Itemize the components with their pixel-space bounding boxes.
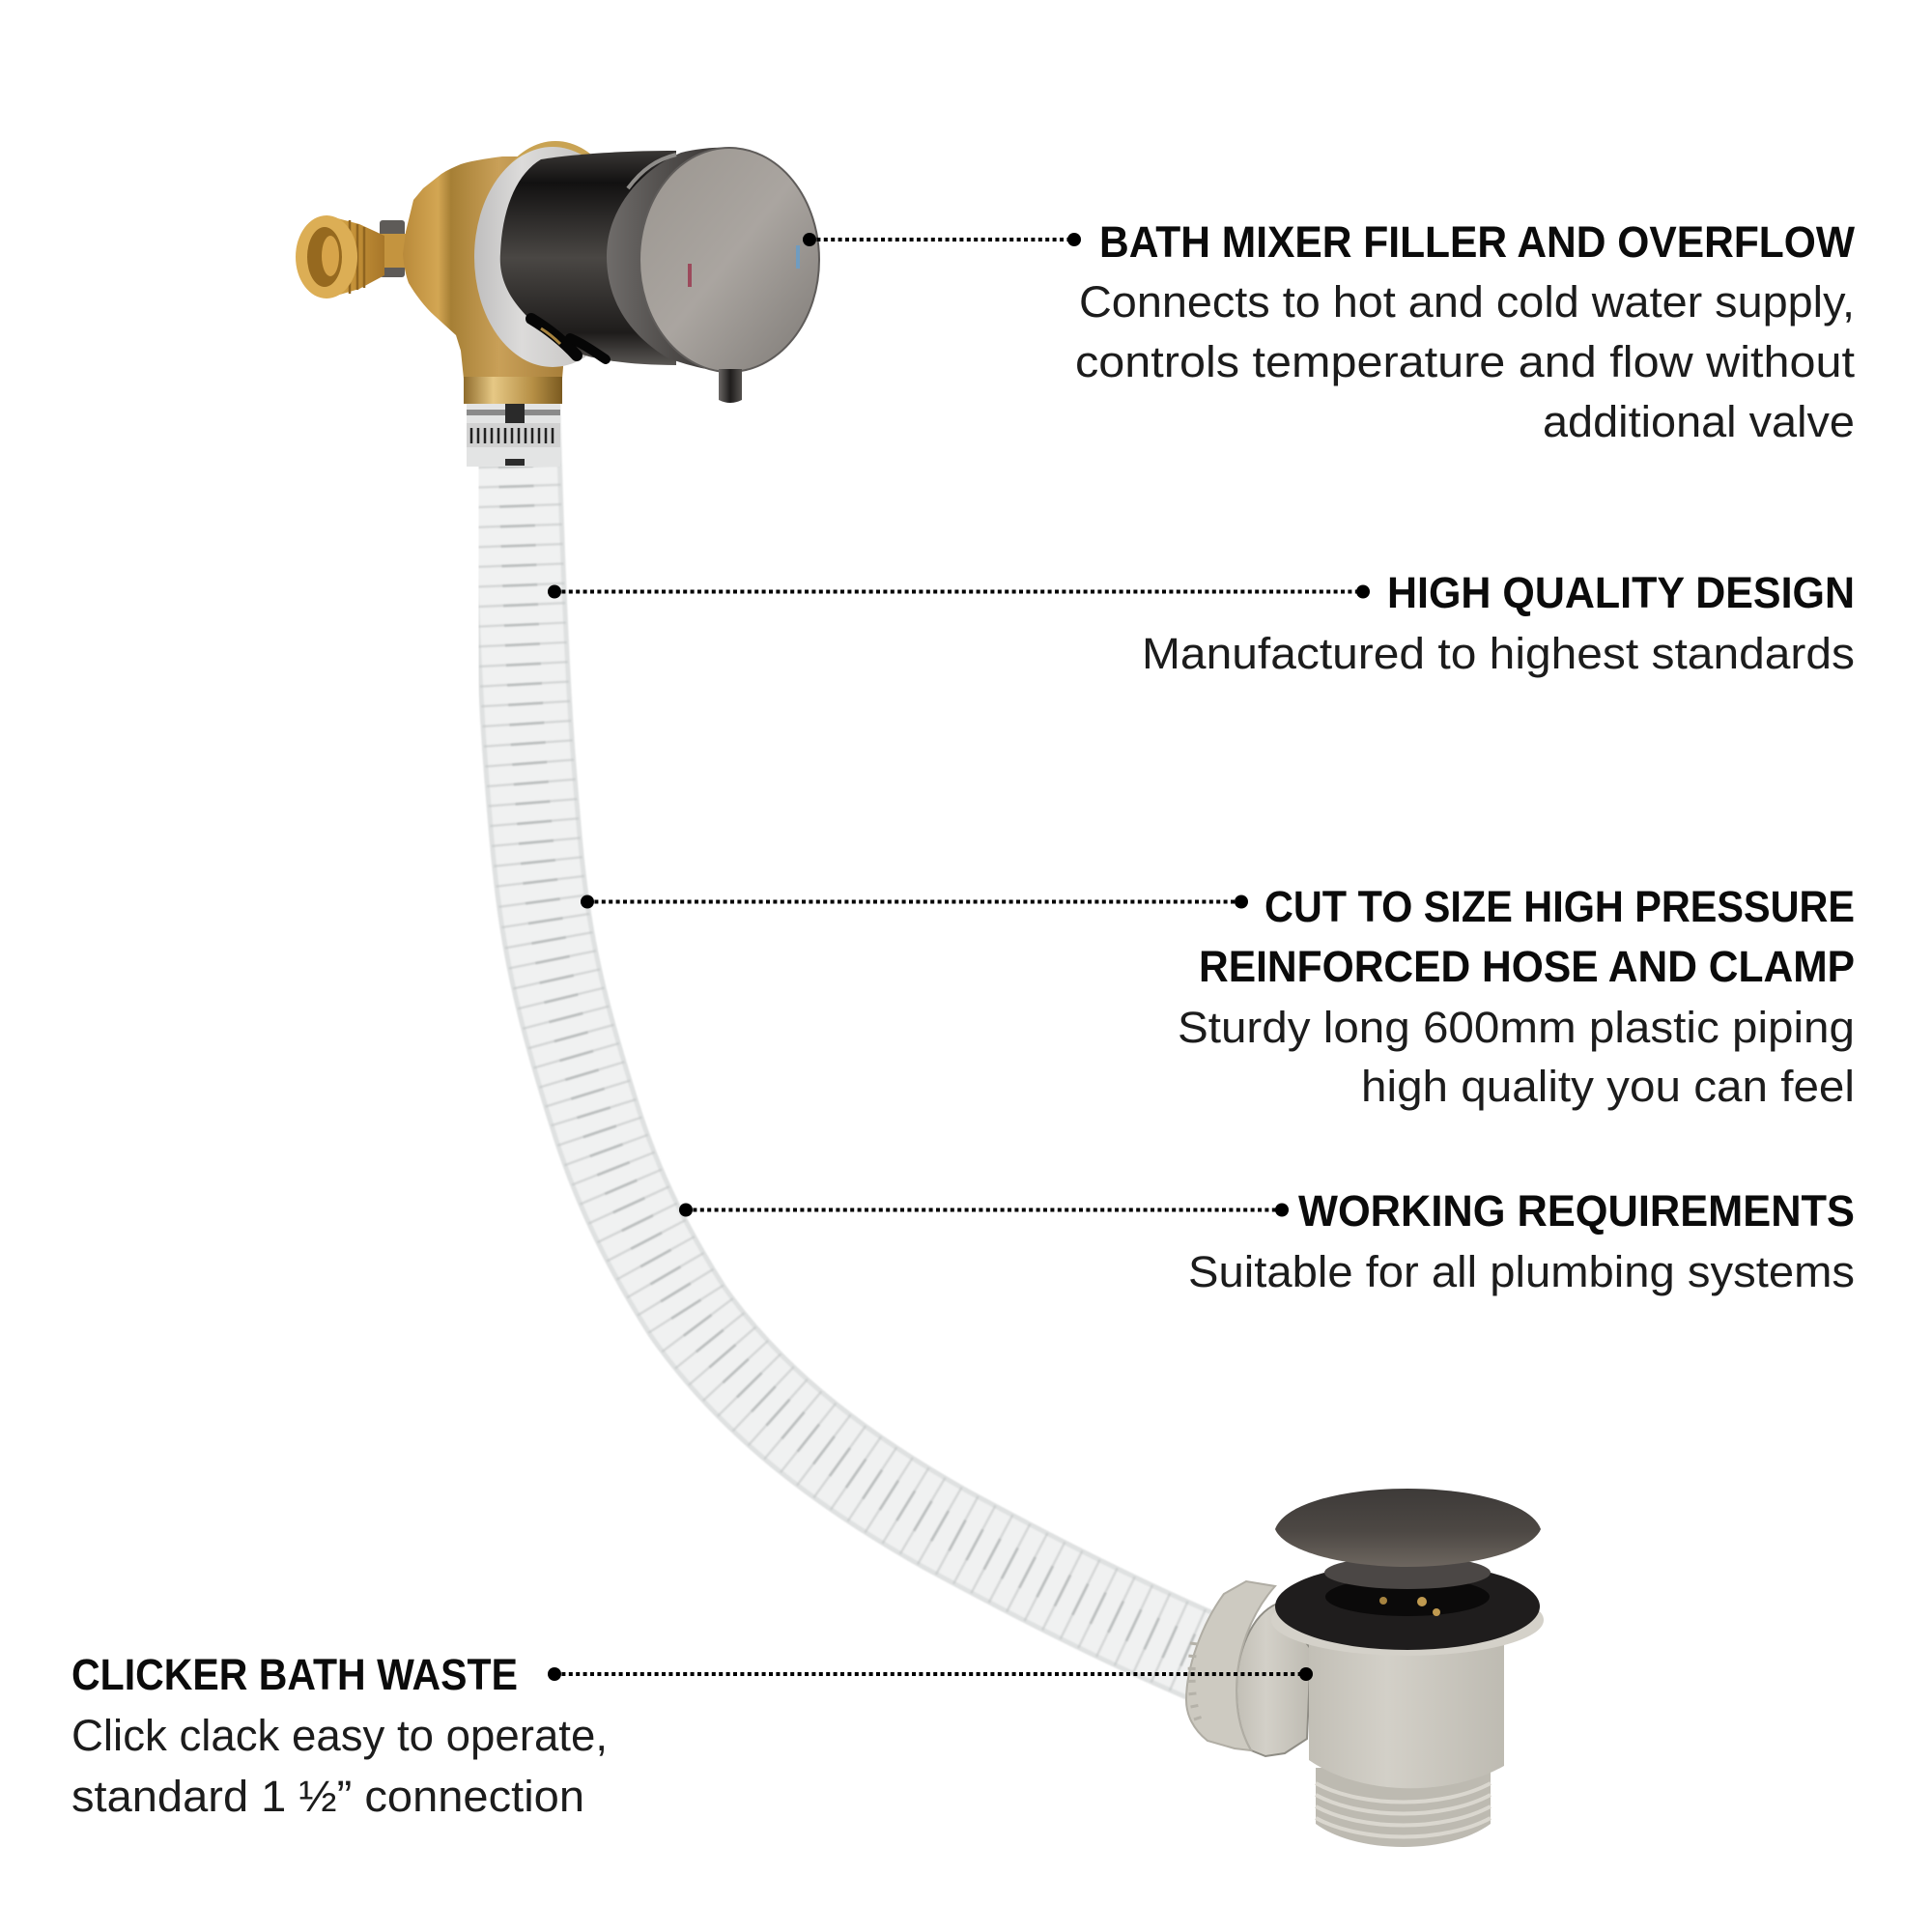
description: controls temperature and flow without — [1075, 337, 1856, 386]
leader start dot — [548, 1667, 561, 1681]
description: Suitable for all plumbing systems — [1188, 1247, 1855, 1296]
elbow — [1236, 1604, 1311, 1756]
description — [1178, 1003, 1855, 1111]
waste fitting — [1186, 1489, 1544, 1847]
hose clamp — [467, 403, 560, 467]
leader line — [686, 1208, 1282, 1211]
leader start dot — [803, 233, 816, 246]
thread — [1316, 1768, 1491, 1847]
description: Manufactured to highest standards — [1142, 629, 1855, 678]
leader line — [810, 238, 1074, 242]
description — [1075, 277, 1856, 446]
heading: BATH MIXER FILLER AND OVERFLOW — [1099, 217, 1855, 267]
brass inlet connector — [296, 215, 408, 298]
leader start dot — [679, 1204, 693, 1217]
description: high quality you can feel — [1361, 1062, 1855, 1111]
body — [1309, 1642, 1504, 1788]
callout: bath mixer filler and overflow — [803, 217, 1856, 446]
leader line — [554, 589, 1363, 593]
hose — [514, 406, 1219, 1663]
heading — [1199, 882, 1855, 991]
description: Connects to hot and cold water supply, — [1079, 277, 1855, 327]
callout: clicker bath waste — [71, 1650, 1313, 1821]
leader line — [554, 1672, 1306, 1676]
cap stem — [1324, 1556, 1491, 1589]
description — [71, 1711, 608, 1821]
heading: HIGH QUALITY DESIGN — [1387, 568, 1855, 617]
union nut — [1186, 1581, 1275, 1750]
heading: CUT TO SIZE HIGH PRESSURE — [1264, 882, 1855, 931]
leader end dot — [1356, 585, 1370, 599]
description: Sturdy long 600mm plastic piping — [1178, 1003, 1855, 1052]
leader start dot — [548, 585, 561, 599]
knob face — [639, 148, 819, 372]
heading: WORKING REQUIREMENTS — [1298, 1186, 1855, 1236]
dark cylinder — [500, 151, 676, 365]
leader end dot — [1275, 1204, 1289, 1217]
description: standard 1 ½” connection — [71, 1772, 584, 1821]
callout: cut to size hose — [581, 882, 1855, 1111]
heading: REINFORCED HOSE AND CLAMP — [1199, 942, 1855, 991]
mixer valve — [296, 141, 819, 404]
brass body and elbow — [403, 156, 563, 379]
callout: working requirements — [679, 1186, 1855, 1296]
lever pin — [719, 369, 742, 403]
leader line — [587, 900, 1241, 904]
hot mark — [688, 264, 692, 287]
knob band — [607, 148, 739, 372]
leader end dot — [1067, 233, 1081, 246]
description: Click clack easy to operate, — [71, 1711, 608, 1760]
cold mark — [796, 245, 800, 269]
callout: high quality design — [548, 568, 1855, 678]
heading: CLICKER BATH WASTE — [71, 1650, 518, 1699]
drain opening — [1325, 1577, 1490, 1616]
description: additional valve — [1543, 397, 1855, 446]
slots — [531, 319, 606, 359]
grey mounting plate — [474, 141, 631, 367]
leader end dot — [1299, 1667, 1313, 1681]
push cap — [1275, 1489, 1541, 1567]
black flange — [1275, 1563, 1540, 1650]
leader end dot — [1235, 895, 1248, 908]
leader start dot — [581, 895, 594, 908]
brass collar — [464, 377, 562, 404]
flange rim — [1271, 1584, 1544, 1656]
